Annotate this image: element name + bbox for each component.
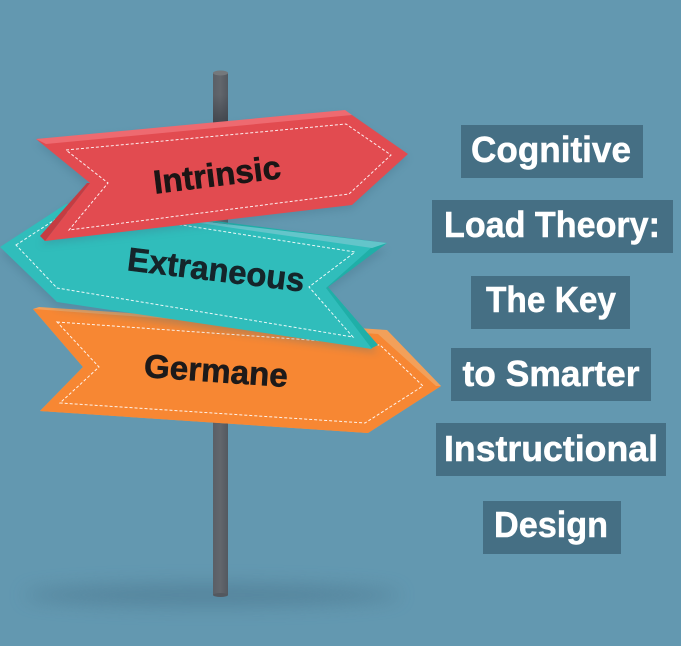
arrow: Intrinsic xyxy=(36,110,408,245)
title line: Cognitive: Cognitive xyxy=(471,129,631,170)
title line: The Key xyxy=(471,276,630,329)
title line: Design xyxy=(483,501,621,554)
signpost pole xyxy=(213,70,228,597)
arrow: Germane xyxy=(33,307,441,433)
arrow: Extraneous xyxy=(0,202,387,353)
title line: The Key: The Key xyxy=(486,279,616,320)
title: Cognitive Load Theory: The Key to Smarter Instructional Design xyxy=(432,125,673,554)
title line: Design: Design xyxy=(494,504,608,545)
title line: to Smarter: to Smarter xyxy=(462,353,640,394)
ground shadow xyxy=(24,584,400,606)
title line: Instructional: Instructional xyxy=(444,428,658,469)
title line: Cognitive xyxy=(461,125,643,178)
title line: Load Theory:: Load Theory: xyxy=(444,204,660,245)
title line: to Smarter xyxy=(451,348,651,401)
label: Germane: Germane xyxy=(143,347,289,394)
label: Extraneous: Extraneous xyxy=(125,240,307,299)
label: Intrinsic: Intrinsic xyxy=(151,148,283,201)
